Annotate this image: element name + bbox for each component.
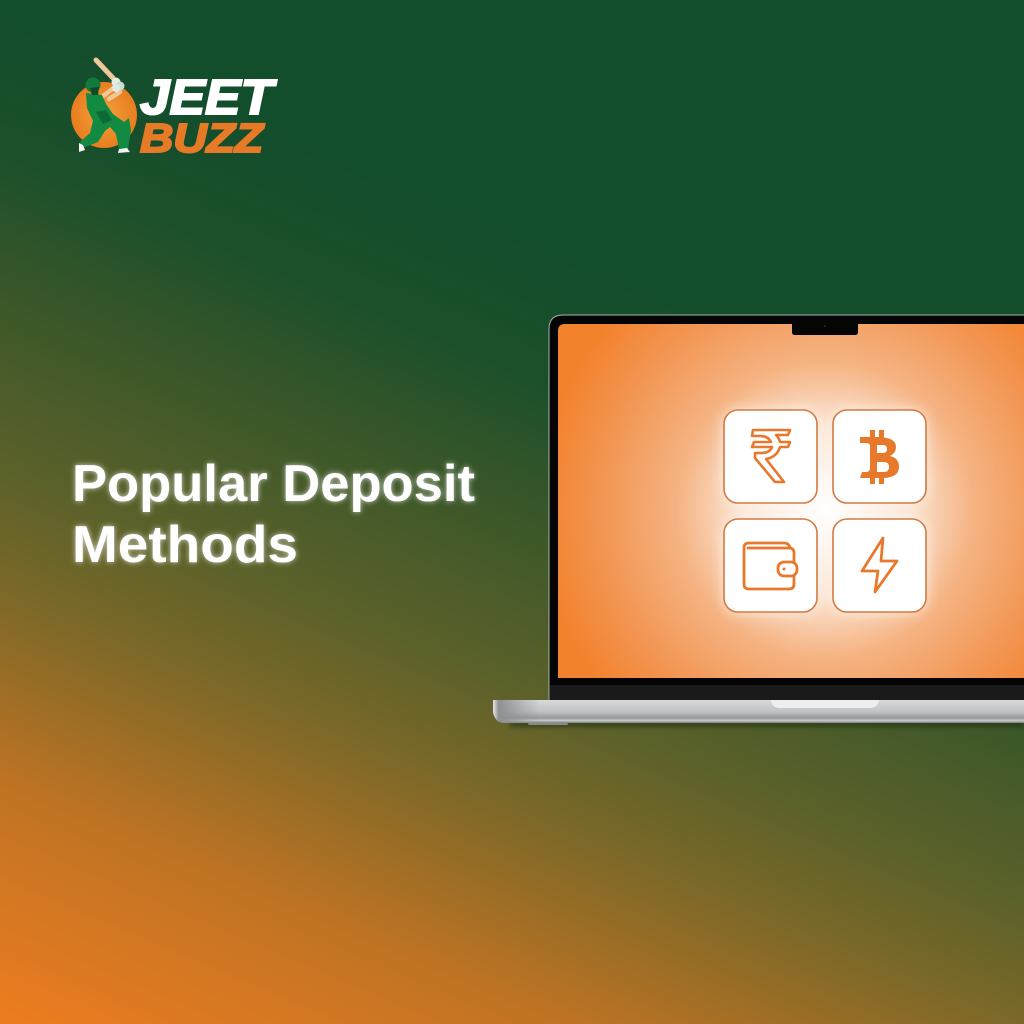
laptop [493, 315, 1024, 727]
logo icon: orange ball [71, 82, 137, 148]
icon tile: wallet [724, 519, 817, 612]
title: Popular Deposit Methods [72, 455, 475, 574]
laptop shadow [510, 722, 1024, 727]
logo icon: cricket batsman [79, 60, 131, 153]
tile glow [724, 410, 926, 612]
laptop notch [792, 324, 858, 335]
title: Popular Deposit Methods: Popular Deposit [72, 455, 475, 513]
icon tile: lightning [833, 519, 926, 612]
icon tile: rupee [724, 410, 817, 503]
logo: Jeet Buzz [71, 60, 277, 161]
title: Popular Deposit Methods: Popular Deposit [72, 455, 475, 513]
title: Popular Deposit Methods: Methods [72, 516, 298, 574]
panel: payment method icons [724, 410, 926, 612]
laptop screen [558, 324, 1024, 678]
logo wordmark: JEET: JEET [140, 71, 277, 125]
laptop lid and bezel [549, 315, 1024, 702]
logo wordmark: BUZZ: BUZZ [140, 115, 265, 161]
title: Popular Deposit Methods: Methods [72, 516, 298, 574]
laptop base [493, 700, 1024, 725]
icon tile: bitcoin [833, 410, 926, 503]
